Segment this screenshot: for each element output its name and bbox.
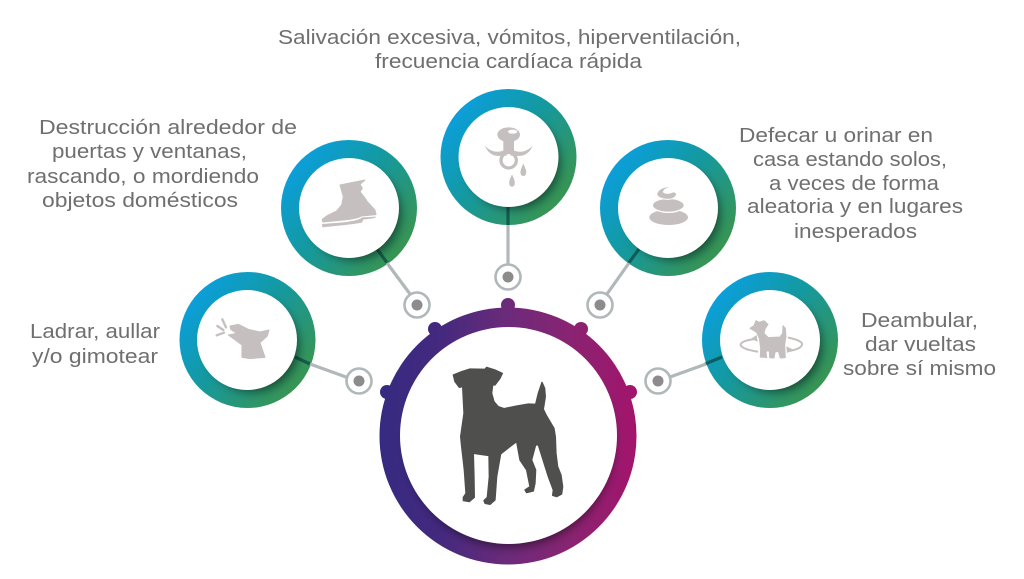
text block: defecating: a veces de forma	[769, 173, 940, 195]
text block: destruction	[27, 117, 297, 212]
text block: destruction: puertas y ventanas,	[52, 141, 247, 163]
icon: vomiting dog	[485, 127, 533, 187]
text block: destruction: rascando, o mordiendo	[27, 166, 259, 188]
panel: poop circle	[600, 140, 736, 276]
panel: vomiting circle	[440, 89, 576, 225]
text block: destruction: objetos domésticos	[42, 190, 238, 212]
text block: barking	[30, 321, 160, 368]
connector: vomiting	[496, 225, 520, 290]
icon: barking dog	[217, 319, 269, 359]
panel: circling dog circle	[702, 272, 838, 408]
icon: dog circling	[741, 321, 802, 358]
icon: dog silhouette	[453, 367, 563, 504]
text block: barking: Ladrar, aullar	[30, 321, 160, 343]
panel: boot circle	[281, 140, 417, 276]
title text: top symptom	[278, 27, 741, 73]
text block: wandering: dar vueltas	[865, 334, 976, 356]
text block: barking: y/o gimotear	[32, 346, 158, 368]
text block: wandering	[843, 310, 996, 380]
panel: central dog ring	[380, 298, 637, 564]
text block: defecating: casa estando solos,	[753, 149, 947, 171]
text block: defecating: Defecar u orinar en	[739, 125, 933, 147]
text block: wandering: Deambular,	[861, 310, 978, 332]
connector: circling dog	[646, 364, 706, 394]
icon: poop	[649, 187, 688, 225]
title text: top symptom: frecuencia cardíaca rápida	[375, 51, 643, 73]
panel: barking circle	[180, 272, 316, 408]
text block: defecating: aleatoria y en lugares	[747, 196, 963, 218]
text block: defecating	[739, 125, 963, 243]
connector: boot	[387, 263, 430, 318]
icon: chewed boot	[322, 180, 376, 227]
title text: top symptom: Salivación excesiva, vómitos, hiperventilación,	[278, 27, 741, 49]
connector: barking	[310, 364, 372, 394]
text block: destruction: Destrucción alrededor de	[39, 117, 297, 139]
connector: poop	[588, 263, 629, 318]
text block: defecating: inesperados	[794, 221, 917, 243]
text block: wandering: sobre sí mismo	[843, 358, 996, 380]
